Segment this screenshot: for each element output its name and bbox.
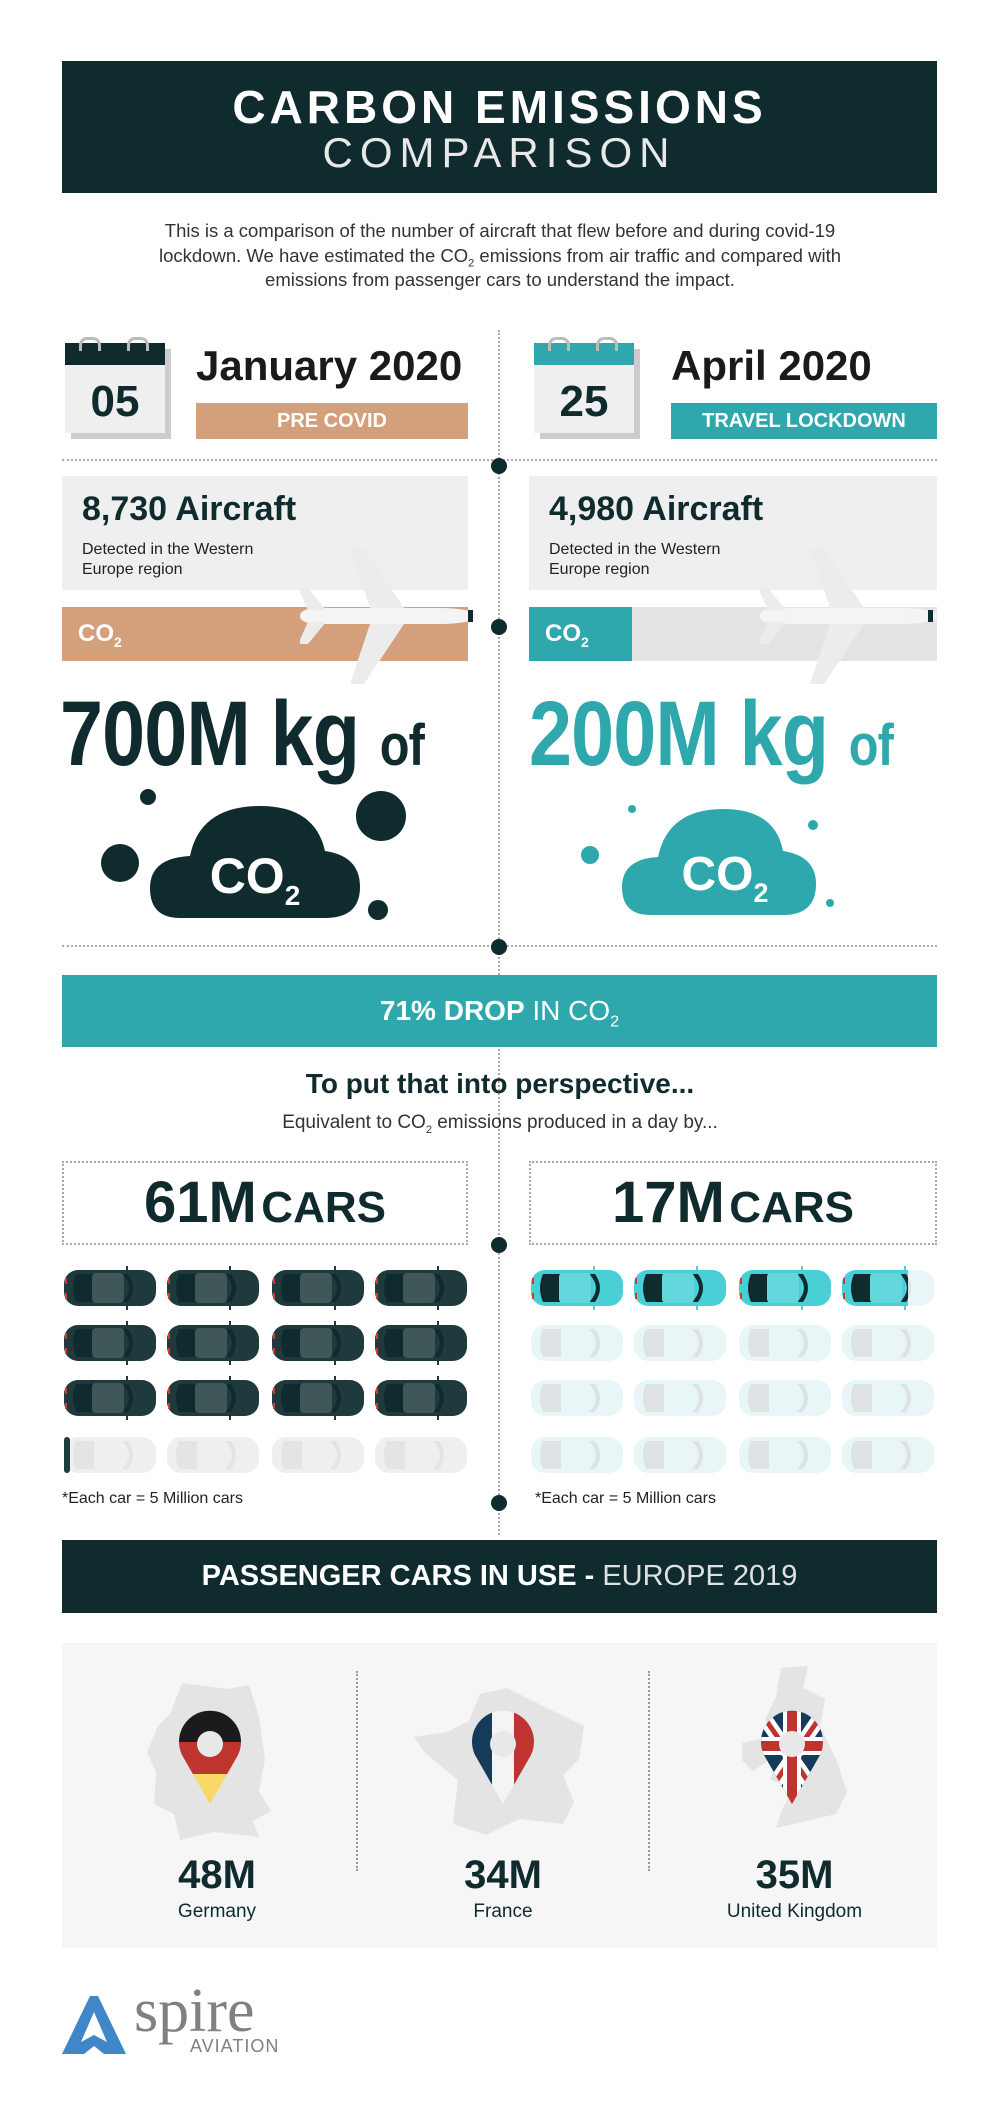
panel: 8,730 aircraft: Europe region xyxy=(82,561,183,578)
tag: travel lockdown xyxy=(671,403,937,439)
note: each car right: *Each car = 5 Million cars xyxy=(535,1490,716,1507)
icon: dark CO2 cloud xyxy=(101,789,406,920)
calendar: 05: 05 xyxy=(91,377,139,426)
car grid: right xyxy=(531,1266,934,1473)
title xyxy=(62,61,937,193)
note: each car left: *Each car = 5 Million cars xyxy=(62,1490,243,1507)
bar: CO2 left xyxy=(62,607,468,661)
panel: countries xyxy=(62,1643,937,1948)
title: CARBON EMISSIONS xyxy=(232,81,767,133)
country: France: France xyxy=(473,1901,533,1922)
country: Germany: 48M xyxy=(178,1853,256,1897)
icon: dark CO2 cloud: 2 xyxy=(285,880,300,911)
banner: 71% drop xyxy=(62,975,937,1047)
country: Germany: Germany xyxy=(178,1901,256,1922)
heading: April 2020: April 2020 xyxy=(671,342,872,389)
panel: 4,980 aircraft: Detected in the Western xyxy=(549,541,720,558)
calendar: 05 xyxy=(65,337,171,439)
big number: 200M kg of: 200M kg of xyxy=(529,683,893,785)
heading: January 2020: January 2020 xyxy=(196,342,462,389)
box: 17M cars: 17M CARS xyxy=(612,1170,854,1235)
subheading: Equivalent to CO2 emissions produced in a day by... xyxy=(282,1112,718,1136)
title: COMPARISON xyxy=(323,129,676,176)
tag: pre covid: PRE COVID xyxy=(277,410,387,432)
center dotted divider xyxy=(498,330,500,1535)
logo: spire aviation xyxy=(62,1977,279,2056)
icon: dark CO2 cloud: CO xyxy=(210,848,285,904)
logo: spire aviation: AVIATION xyxy=(190,2036,279,2056)
tag: travel lockdown: TRAVEL LOCKDOWN xyxy=(702,410,906,432)
country: France: 34M xyxy=(464,1853,542,1897)
banner: 71% drop: 71% DROP IN CO2 xyxy=(380,995,619,1031)
panel: 4,980 aircraft: 4,980 Aircraft xyxy=(549,490,763,528)
box: 17M cars xyxy=(529,1161,937,1245)
calendar: 25: 25 xyxy=(560,377,608,426)
bar: CO2 left: CO2 xyxy=(78,620,122,650)
intro text: This is a comparison of the number of aircraft that flew before and during covid-19 lockdown. We have estimated the CO2 emissions from air traffic and compared with emissions from passenger cars to understand the impact. xyxy=(159,220,841,290)
calendar: 25 xyxy=(534,337,640,439)
box: 61M cars xyxy=(62,1161,468,1245)
big number: 700M kg of: 700M kg of xyxy=(60,683,424,785)
panel: 8,730 aircraft xyxy=(62,476,468,590)
box: 61M cars: 61M CARS xyxy=(144,1170,386,1235)
country: United Kingdom: 35M xyxy=(756,1853,833,1897)
tag: pre covid xyxy=(196,403,468,439)
panel: 4,980 aircraft xyxy=(529,476,937,590)
banner: passenger cars xyxy=(62,1540,937,1613)
panel: 8,730 aircraft: 8,730 Aircraft xyxy=(82,490,296,528)
heading: perspective: To put that into perspective... xyxy=(306,1068,694,1099)
icon: teal CO2 cloud: CO xyxy=(681,848,753,901)
country: United Kingdom: United Kingdom xyxy=(727,1901,862,1922)
logo: spire aviation: spire xyxy=(134,1977,255,2045)
panel: 8,730 aircraft: Detected in the Western xyxy=(82,541,253,558)
bar: CO2 right: CO2 xyxy=(545,620,589,650)
country: Germany xyxy=(147,1683,271,1922)
icon: plane right xyxy=(760,590,940,684)
icon: teal CO2 cloud xyxy=(581,805,834,915)
bar: CO2 right xyxy=(529,607,937,661)
icon: teal CO2 cloud: 2 xyxy=(753,878,769,908)
car grid: left xyxy=(64,1266,467,1473)
panel: 4,980 aircraft: Europe region xyxy=(549,561,650,578)
banner: passenger cars: PASSENGER CARS IN USE - EUROPE 2019 xyxy=(202,1560,797,1592)
country: United Kingdom xyxy=(727,1666,862,1922)
icon: plane left xyxy=(300,590,480,684)
country: France xyxy=(414,1688,584,1922)
